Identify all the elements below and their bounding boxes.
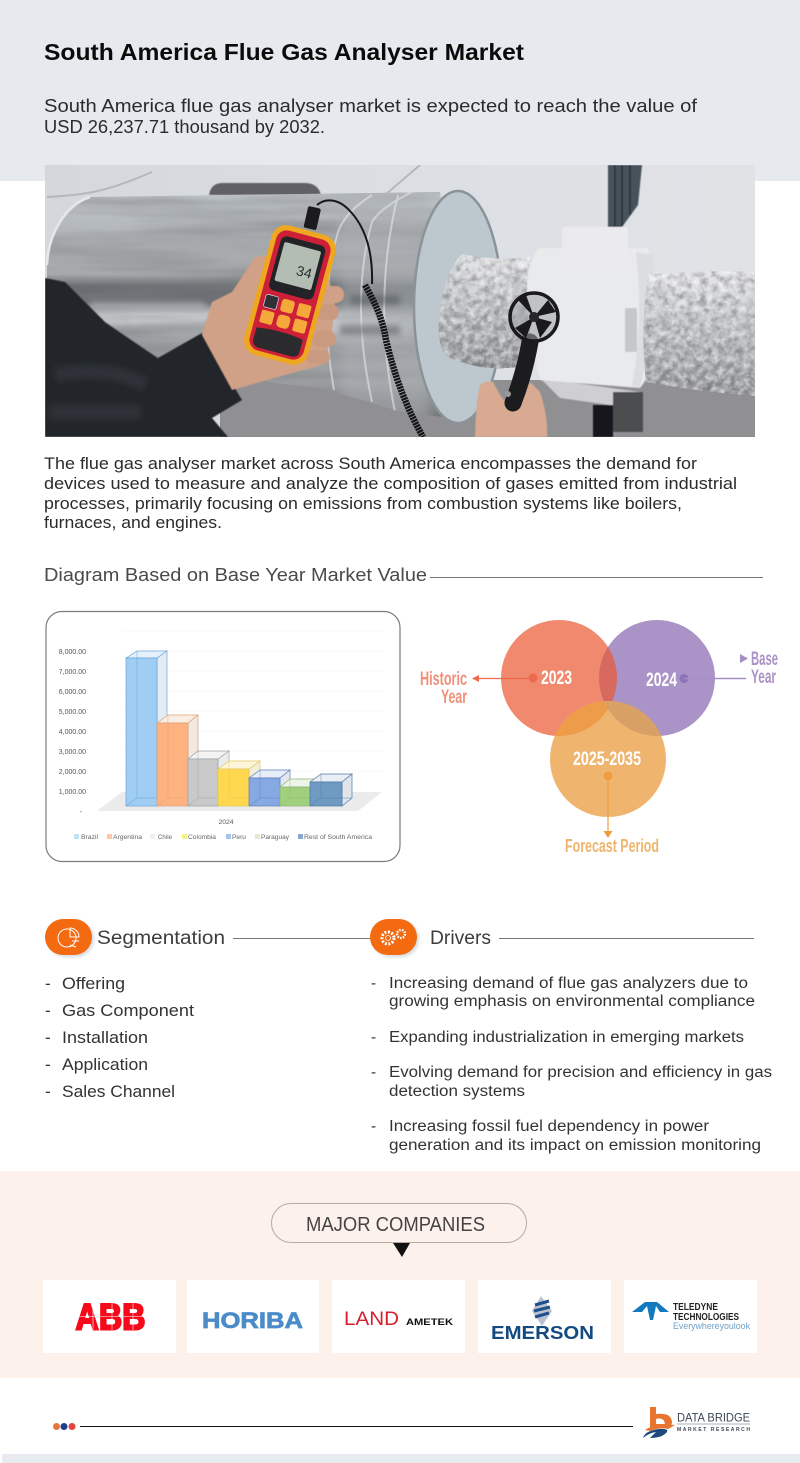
- bottom band: [2, 1454, 800, 1463]
- arrow: forecast period: [604, 772, 612, 838]
- chart axis labels: 5,000.00: [59, 709, 86, 716]
- card: ABB: ABB: [76, 1296, 146, 1338]
- footer dots: [53, 1423, 76, 1430]
- segmentation list: Gas Component: [62, 1001, 194, 1020]
- photo: anemometer: [505, 293, 558, 403]
- drivers list: generation and its impact on emission monitoring: [389, 1137, 761, 1154]
- heading: major companies: MAJOR COMPANIES: [306, 1214, 485, 1236]
- segmentation list: -: [45, 1028, 51, 1047]
- card: Teledyne: Everywhereyoulook: [673, 1321, 750, 1332]
- logo: Data Bridge: MARKET RESEARCH: [677, 1427, 750, 1433]
- logo: Data Bridge: DATA BRIDGE: [677, 1412, 750, 1424]
- chart legend: Brazil: [81, 834, 98, 841]
- photo: handheld meter: 34: [295, 262, 314, 282]
- photo: insulated top object: [209, 183, 321, 195]
- venn diagram: [420, 620, 778, 856]
- card: Teledyne: [624, 1280, 757, 1353]
- photo: handheld meter: [244, 225, 336, 365]
- drivers list: Increasing demand of flue gas analyzers due to: [389, 975, 748, 992]
- footer line: [80, 1426, 633, 1428]
- photo: white fan housing: [527, 227, 653, 437]
- card: Teledyne: TECHNOLOGIES: [673, 1311, 739, 1323]
- bar: Argentina: [157, 715, 198, 806]
- photo: technician measuring duct airflow: [45, 165, 755, 437]
- label: historic year: [420, 669, 467, 708]
- chart axis labels: 7,000.00: [59, 669, 86, 676]
- chart axis labels: [59, 649, 86, 816]
- description text: processes, primarily focusing on emissions from combustion systems like boilers,: [44, 495, 682, 513]
- card: Teledyne: TELEDYNE: [673, 1301, 718, 1313]
- heading: drivers: Drivers: [430, 928, 491, 949]
- label: historic year: Historic: [420, 669, 467, 690]
- chart legend: [74, 834, 372, 841]
- arrow: down: [393, 1243, 410, 1257]
- segmentation list: Offering: [62, 974, 125, 993]
- heading: drivers: [370, 919, 754, 957]
- segmentation list: -: [45, 974, 51, 993]
- bar: Peru: [249, 770, 290, 806]
- icon: gears: [382, 930, 405, 944]
- description text: The flue gas analyser market across South America encompasses the demand for: [44, 455, 698, 473]
- chart axis labels: 8,000.00: [59, 649, 86, 656]
- chart axis labels: 6,000.00: [59, 689, 86, 696]
- card: Land Ametek: LAND: [344, 1309, 399, 1330]
- card: Horiba: HORIBA: [202, 1308, 303, 1333]
- segmentation list: Sales Channel: [62, 1082, 175, 1101]
- arrow: historic year: [472, 674, 538, 682]
- header band: [0, 0, 800, 181]
- bar: Brazil: [126, 651, 167, 806]
- chart legend: Peru: [232, 834, 246, 841]
- photo: main duct: [45, 180, 502, 430]
- card: Emerson: EMERSON: [491, 1322, 594, 1343]
- segmentation list: -: [45, 1055, 51, 1074]
- label: forecast period: Forecast Period: [565, 836, 659, 856]
- label: base year: [751, 649, 778, 688]
- description text: [44, 455, 737, 532]
- bar: Rest of South America: [310, 774, 352, 806]
- drivers list: [371, 975, 772, 1154]
- photo: holding hand: [202, 250, 344, 390]
- segmentation list: [45, 974, 194, 1101]
- card: Horiba: [187, 1280, 319, 1353]
- icon: pie chart: [58, 928, 79, 947]
- bar: Chile: [188, 751, 229, 806]
- photo: foil section right: [643, 271, 755, 396]
- chart legend: Rest of South America: [304, 834, 372, 841]
- chart axis labels: 3,000.00: [59, 749, 86, 756]
- chart legend: Argentina: [113, 834, 142, 841]
- photo: duct end disk: [414, 191, 502, 423]
- card: Land Ametek: AMETEK: [406, 1317, 453, 1328]
- drivers list: Increasing fossil fuel dependency in power: [389, 1118, 709, 1135]
- intro text: [44, 96, 698, 137]
- bar: Colombia: [218, 761, 260, 806]
- chart axis labels: -: [80, 809, 83, 816]
- drivers list: Expanding industrialization in emerging markets: [389, 1029, 744, 1046]
- heading: major companies: [272, 1204, 526, 1242]
- chart legend: Colombia: [188, 834, 216, 841]
- intro text: USD 26,237.71 thousand by 2032.: [44, 117, 325, 137]
- title: South America Flue Gas Analyser Market: [44, 39, 524, 65]
- card: ABB: [43, 1280, 176, 1353]
- chart legend: Paraguay: [261, 834, 290, 841]
- chart floor: [97, 792, 382, 811]
- segmentation list: -: [45, 1082, 51, 1101]
- label: base year: Base: [751, 649, 778, 670]
- venn label: 2025-2035: 2025-2035: [573, 749, 641, 770]
- drivers list: -: [371, 975, 376, 992]
- card: Land Ametek: [332, 1280, 465, 1353]
- chart axis labels: 2,000.00: [59, 769, 86, 776]
- description text: devices used to measure and analyze the composition of gases emitted from industrial: [44, 475, 737, 493]
- heading: segmentation: Segmentation: [97, 928, 225, 949]
- photo: foil section left: [439, 254, 533, 368]
- photo: jacket: [45, 278, 242, 437]
- photo: second hand: [475, 381, 547, 437]
- drivers list: detection systems: [389, 1083, 525, 1100]
- venn label: 2023: 2023: [541, 668, 572, 689]
- heading: segmentation: [45, 919, 372, 957]
- panel: bar chart: [46, 612, 400, 862]
- chart category label: 2024: [218, 819, 234, 826]
- panel: major companies: [0, 1171, 800, 1378]
- drivers list: -: [371, 1118, 376, 1135]
- arrow: base year: [680, 654, 748, 683]
- drivers list: -: [371, 1064, 376, 1081]
- venn label: 2024: 2024: [646, 670, 677, 691]
- photo: cable: [303, 200, 423, 437]
- segmentation list: -: [45, 1001, 51, 1020]
- chart legend: Chile: [158, 834, 172, 841]
- card: Emerson: [478, 1280, 611, 1353]
- chart axis labels: 4,000.00: [59, 729, 86, 736]
- drivers list: -: [371, 1029, 376, 1046]
- segmentation list: Installation: [62, 1028, 148, 1047]
- segmentation list: Application: [62, 1055, 148, 1074]
- description text: furnaces, and engines.: [44, 514, 222, 532]
- photo: hanging wire: [47, 165, 420, 197]
- diagram heading: Diagram Based on Base Year Market Value: [44, 565, 427, 585]
- chart axis labels: 1,000.00: [59, 789, 86, 796]
- drivers list: Evolving demand for precision and efficiency in gas: [389, 1064, 772, 1081]
- photo: conduit: [608, 165, 642, 227]
- logo: Data Bridge: [643, 1407, 750, 1438]
- label: base year: Year: [751, 667, 776, 688]
- drivers list: growing emphasis on environmental compliance: [389, 993, 755, 1010]
- label: historic year: Year: [441, 687, 467, 708]
- bar: Paraguay: [280, 779, 321, 806]
- intro text: South America flue gas analyser market is expected to reach the value of: [44, 96, 698, 116]
